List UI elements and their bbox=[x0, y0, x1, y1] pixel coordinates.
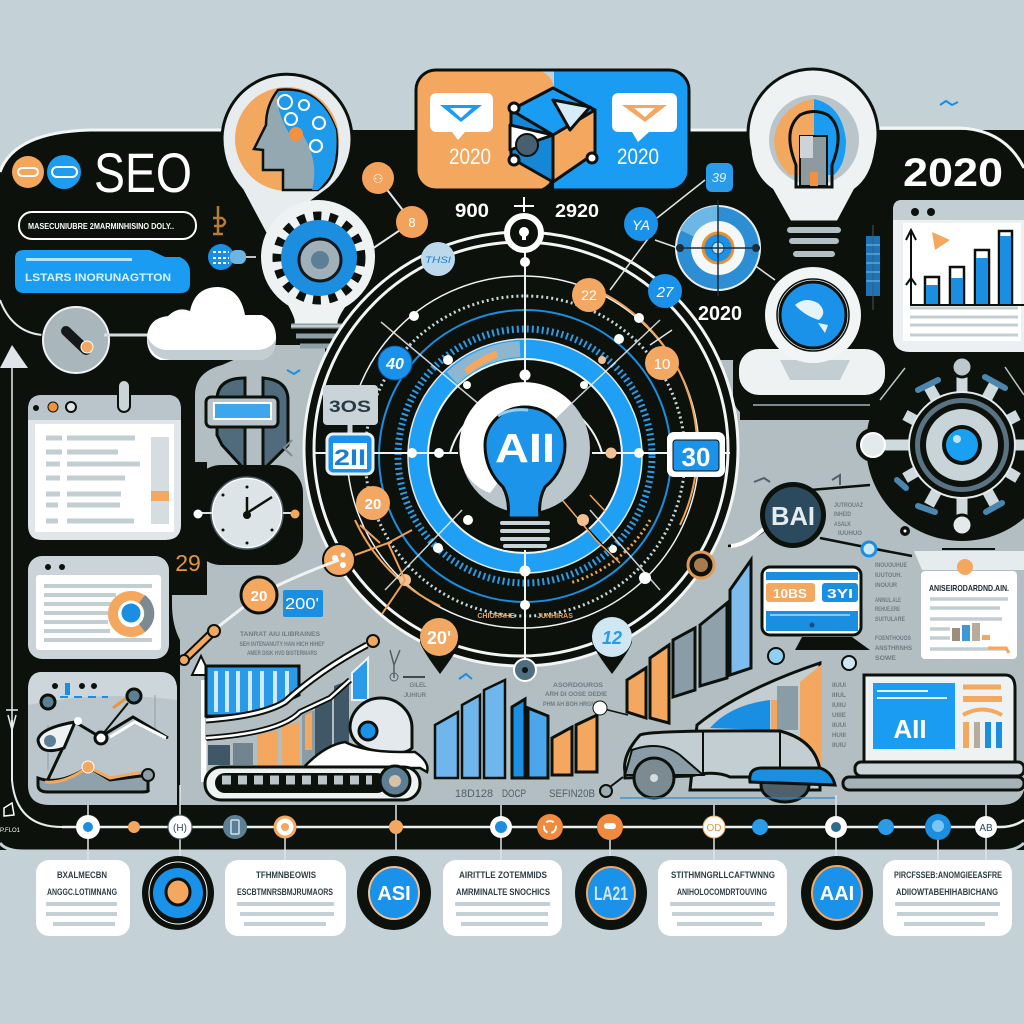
small node connectors bbox=[610, 180, 775, 345]
timeline node 10 bbox=[703, 816, 725, 838]
caption text centre: PHM AH BOH HRGNKB bbox=[543, 701, 603, 708]
icon: bottom-left mark: P.FLO1 bbox=[0, 828, 21, 834]
icon: monitor: 10BS bbox=[773, 586, 807, 601]
caption text vertical list: IIUUI bbox=[832, 723, 846, 729]
ring node: keyhole bbox=[507, 216, 541, 250]
growth path with nodes bbox=[179, 560, 339, 665]
bar labels: DOCP bbox=[502, 788, 526, 800]
decorative squiggle top right bbox=[940, 101, 958, 105]
ring node: tag 30 bbox=[667, 432, 725, 477]
icon: bottom-left mark bbox=[0, 803, 21, 834]
timeline node 3: (H) bbox=[173, 823, 187, 834]
label 2020 top right: 2020 bbox=[903, 151, 1003, 195]
ring node: orange 22 bbox=[572, 278, 606, 312]
timeline node 11 bbox=[752, 819, 768, 835]
icon: laptop AI: AII bbox=[893, 714, 927, 744]
node: blue square bbox=[706, 163, 733, 192]
icon: BAI magnifier bbox=[728, 482, 912, 556]
card 4 bbox=[658, 860, 787, 936]
node: orange lower bbox=[396, 206, 428, 238]
panel: top right bar chart bbox=[893, 200, 1024, 352]
card 1 bbox=[36, 860, 130, 936]
blue tab button bbox=[15, 250, 190, 293]
growth path with nodes: 20 bbox=[251, 588, 267, 605]
icon: small brass key bbox=[213, 206, 225, 234]
node: blue square: 39 bbox=[712, 170, 726, 185]
top central box bbox=[416, 70, 689, 190]
caption text right top: INOUUR bbox=[875, 582, 897, 589]
icon: switch knob bbox=[42, 306, 150, 374]
icon: speech bubbles bbox=[206, 370, 300, 470]
caption text right top: FOENTHOUOS bbox=[875, 635, 912, 642]
caption text vertical list: HUIII bbox=[832, 733, 846, 739]
central AI bulb bbox=[459, 382, 590, 550]
ring node: orange dots bbox=[323, 544, 355, 576]
timeline node 12 bbox=[825, 816, 847, 838]
caption text centre: ASORDOUROS bbox=[553, 682, 604, 689]
icon: clock bbox=[193, 465, 303, 565]
timeline node 9 bbox=[597, 814, 623, 840]
pin: blue 12: 12 bbox=[602, 628, 622, 648]
connector lines top left bbox=[372, 178, 412, 249]
card 5 bbox=[883, 860, 1012, 936]
caption text right top: IUUHUO bbox=[838, 530, 862, 537]
timeline node 5 bbox=[275, 817, 295, 837]
ring node: pale blue: THSI bbox=[425, 255, 452, 265]
ring node: orange 22: 22 bbox=[581, 287, 597, 303]
left arrow bbox=[0, 345, 28, 730]
ring node: pale blue bbox=[421, 242, 455, 276]
panel: browser window list bbox=[28, 380, 181, 540]
SEO heading group bbox=[12, 141, 192, 204]
ring node: blue 27: 27 bbox=[656, 284, 674, 301]
timeline node 15: AB bbox=[979, 823, 993, 834]
badge: AAI bbox=[801, 856, 873, 930]
central radial chart: CHIORAHE bbox=[477, 613, 515, 620]
ring node: bottom lens bbox=[514, 659, 536, 681]
card 3 bbox=[443, 860, 562, 936]
caption text right top: SOWE bbox=[875, 655, 897, 662]
node: orange top: ⚇ bbox=[373, 172, 383, 186]
card 5: PIRCFSSEB:ANOMGIEEASFRE bbox=[894, 870, 1002, 880]
ring node: tag 3OS: 3OS bbox=[329, 397, 371, 416]
ring node: tag 2II: 2II bbox=[334, 445, 366, 470]
card 2 bbox=[225, 860, 346, 936]
icon: AI head bulb bbox=[222, 74, 352, 235]
caption text right top: JUTROUAZ bbox=[834, 502, 863, 509]
robot conveyor chart bbox=[192, 635, 428, 800]
bar labels: SEFIN20B bbox=[549, 788, 595, 800]
card 4: STITHMNGRLLCAFTWNNG bbox=[671, 870, 775, 880]
timeline node 4 bbox=[223, 815, 247, 839]
icon: BAI magnifier: BAI bbox=[771, 501, 815, 531]
icon: gear bulb bbox=[261, 200, 376, 346]
ring node: orange 10 bbox=[645, 346, 679, 380]
icon: futuristic car bbox=[600, 663, 835, 802]
caption text left bbox=[240, 631, 325, 657]
timeline node 13 bbox=[878, 819, 894, 835]
icon: large gear bbox=[861, 357, 1024, 535]
panel: main black board bbox=[0, 128, 1024, 851]
caption text left: TANRAT AIU ILIBRAINES bbox=[240, 631, 321, 638]
caption text right top: REHUE.ERE bbox=[875, 606, 900, 613]
caption text vertical list: IUIIU bbox=[832, 703, 846, 709]
growth path with nodes: 200' bbox=[285, 596, 319, 613]
bar labels: 18D128 bbox=[455, 788, 493, 800]
timeline node 6 bbox=[389, 820, 403, 834]
label 29: 29 bbox=[175, 550, 201, 576]
caption text right top: ASALK bbox=[834, 521, 851, 528]
blue tab button: LSTARS INORUNAGTTON bbox=[25, 272, 171, 284]
caption text vertical list: IIUUI bbox=[832, 683, 846, 689]
caption text vertical list: IIUIU bbox=[832, 743, 846, 749]
caption text left: AMER DISK HVD BISTERMARS bbox=[247, 650, 317, 657]
node bbox=[593, 701, 607, 715]
caption text right top: INOUOUHUE bbox=[875, 562, 908, 569]
badge: LA21 bbox=[575, 856, 647, 930]
small link icons bbox=[754, 475, 910, 536]
cube icon bbox=[509, 88, 597, 182]
timeline node 8 bbox=[537, 814, 563, 840]
ring node: tag 30: 30 bbox=[682, 442, 710, 472]
large rising bars bbox=[627, 560, 751, 723]
card 3: AMRMINALTE SNOCHICS bbox=[456, 887, 550, 897]
caption text right top bbox=[834, 502, 913, 662]
pin: orange 20 bbox=[420, 618, 460, 674]
panel: gear backdrop bbox=[856, 349, 1024, 541]
ring node: orange 20 bbox=[356, 486, 390, 520]
card 2: ESCBTMNRSBMJRUMAORS bbox=[237, 887, 333, 897]
ring node: brass bolt bbox=[688, 552, 714, 578]
icon: right lightbulb bbox=[748, 69, 878, 254]
pin: orange 20: 20' bbox=[427, 628, 451, 648]
card 1: BXALMECBN bbox=[57, 870, 107, 880]
node: blue YA bbox=[624, 207, 658, 241]
blue and orange bar chart bbox=[435, 680, 597, 778]
panel: gray work area bbox=[172, 345, 1024, 805]
icon: blue plug bbox=[208, 244, 256, 270]
card 2: TFHMNBEOWIS bbox=[256, 870, 316, 880]
year labels: 2920 bbox=[555, 201, 599, 221]
small caption beside robot bbox=[390, 650, 472, 699]
card 3: AIRITTLE ZOTEMMIDS bbox=[459, 870, 547, 880]
badge: orange lens bbox=[142, 856, 214, 930]
timeline node 10: OD bbox=[706, 823, 722, 834]
icon: monitor bbox=[762, 567, 870, 670]
year labels bbox=[455, 197, 599, 222]
badge: ASI: ASI bbox=[377, 883, 411, 905]
bar labels bbox=[455, 788, 595, 800]
timeline bbox=[62, 785, 1024, 860]
caption text right top: SUITULARE bbox=[875, 616, 906, 623]
label 2020 near lens: 2020 bbox=[698, 303, 742, 325]
vertical ruler bbox=[866, 225, 880, 310]
small caption beside robot: GILEL bbox=[409, 683, 427, 689]
caption text vertical list bbox=[832, 683, 846, 749]
icon: target lens bbox=[676, 200, 760, 296]
card 1: ANGGC.LOTIMNANG bbox=[47, 887, 117, 897]
caption text vertical list: IIIUL bbox=[832, 693, 846, 699]
panel: report card bbox=[914, 549, 1024, 659]
ring node: blue 27 bbox=[648, 274, 682, 308]
node: orange lower: 8 bbox=[408, 215, 416, 230]
timeline node 2 bbox=[128, 821, 140, 833]
connector to bars bbox=[590, 708, 628, 718]
SEO heading group: SEO bbox=[94, 141, 192, 204]
central radial chart bbox=[303, 231, 739, 668]
left speech bubble bbox=[430, 93, 493, 140]
node: orange top bbox=[362, 162, 394, 194]
ring node: tag 2II bbox=[327, 434, 373, 474]
caption text right top: ANINUL.ALE bbox=[875, 597, 901, 604]
ring node: blue 40 bbox=[378, 346, 412, 380]
icon: cloud bbox=[147, 287, 276, 360]
ring node: tag 3OS bbox=[323, 385, 378, 435]
caption text centre: ARH DI OOSE DEDIE bbox=[545, 691, 608, 698]
timeline node 3 bbox=[168, 815, 192, 839]
small caption beside robot: JUHIUR bbox=[404, 693, 427, 699]
node: blue YA: YA bbox=[632, 217, 650, 233]
central radial chart: JUNHIRAS bbox=[537, 613, 573, 620]
icon: globe webcam bbox=[739, 267, 885, 405]
timeline node 1 bbox=[76, 815, 100, 839]
badge: AAI: AAI bbox=[820, 883, 854, 905]
card 5: ADIIOWTABEHIHABICHANG bbox=[896, 887, 998, 897]
left year: 2020 bbox=[449, 144, 491, 169]
panel: lamp base backdrop bbox=[733, 340, 893, 418]
caption text right top: IUUTOUH. bbox=[875, 572, 902, 579]
panel: browser window donut bbox=[28, 556, 169, 659]
ring node: orange 20: 20 bbox=[365, 496, 381, 513]
caption text left: SEH INTENANUTY HAN HICH HIHEF bbox=[240, 641, 325, 648]
ring node: orange 10: 10 bbox=[654, 356, 670, 373]
search text pill: MASECUNIUBRE 2MARMINHISINO DOLY.. bbox=[28, 222, 174, 231]
card 4: ANIHOLOCOMDRTOUVING bbox=[677, 887, 767, 897]
right speech bubble bbox=[612, 93, 677, 142]
panel: report card: ANISEIRODARDND.AIN. bbox=[929, 583, 1009, 593]
panel: line chart bbox=[28, 672, 177, 805]
caption text right top: ANSTHRNHS bbox=[875, 645, 913, 652]
icon: laptop AI bbox=[843, 675, 1024, 790]
timeline node 7 bbox=[490, 816, 512, 838]
pin: blue 12 bbox=[592, 617, 632, 674]
central AI bulb: AII bbox=[495, 425, 555, 471]
caption text centre bbox=[543, 682, 608, 708]
orange connectors bbox=[355, 525, 412, 614]
badge: LA21: LA21 bbox=[594, 884, 628, 905]
search text pill bbox=[19, 212, 196, 239]
ring node: blue 40: 40 bbox=[385, 356, 404, 373]
caption text right top: INHEID bbox=[834, 511, 851, 518]
year labels: 900 bbox=[455, 201, 489, 222]
caption text vertical list: UIIIE bbox=[832, 713, 846, 719]
badge: ASI bbox=[357, 856, 431, 930]
right year: 2020 bbox=[617, 144, 659, 169]
timeline node 14 bbox=[925, 814, 951, 840]
icon: monitor: 3YI bbox=[827, 586, 853, 601]
timeline node 15 bbox=[975, 816, 997, 838]
